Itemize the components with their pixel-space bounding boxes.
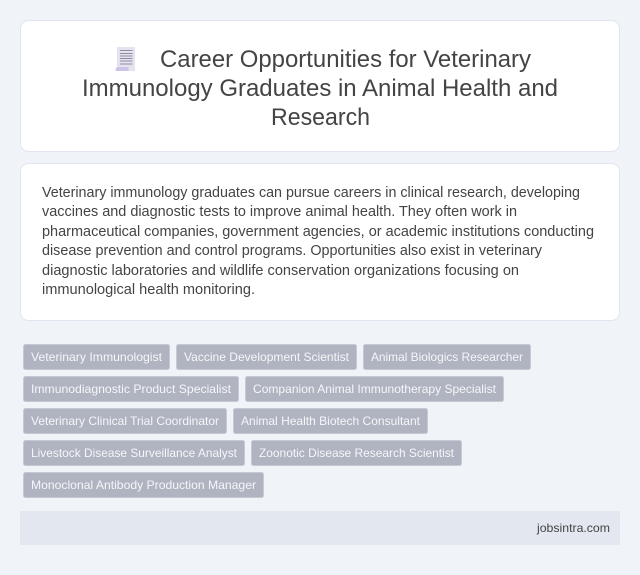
tag: Livestock Disease Surveillance Analyst: [24, 440, 244, 466]
tag: Livestock Disease Surveillance Analyst: Livestock Disease Surveillance Analyst: [31, 446, 238, 460]
tag: Animal Health Biotech Consultant: Animal Health Biotech Consultant: [241, 414, 421, 428]
title: Career Opportunities for Veterinary: [160, 46, 531, 73]
icon: document scroll: [116, 47, 135, 71]
tag: Veterinary Immunologist: [24, 344, 170, 370]
panel: title card: [20, 20, 620, 152]
footer source text: jobsintra.com: [536, 521, 610, 535]
footer bar: [20, 511, 620, 545]
tag: Veterinary Clinical Trial Coordinator: Veterinary Clinical Trial Coordinator: [31, 414, 219, 428]
tag: Animal Biologics Researcher: [364, 344, 530, 370]
tag: Vaccine Development Scientist: Vaccine Development Scientist: [184, 350, 350, 364]
tag: Zoonotic Disease Research Scientist: [252, 440, 462, 466]
tag: Veterinary Clinical Trial Coordinator: [24, 408, 226, 434]
career tags: [24, 344, 530, 498]
tag: Immunodiagnostic Product Specialist: Immunodiagnostic Product Specialist: [31, 382, 232, 396]
description text: vaccines and diagnostic tests to improve animal health. They often work in: [42, 204, 517, 220]
tag: Animal Biologics Researcher: Animal Biologics Researcher: [371, 350, 523, 364]
tag: Companion Animal Immunotherapy Specialist: Companion Animal Immunotherapy Specialist: [253, 382, 497, 396]
tag: Vaccine Development Scientist: [176, 344, 356, 370]
description text: Veterinary immunology graduates can pursue careers in clinical research, developing: [42, 185, 580, 201]
description text: [42, 185, 594, 298]
description text: diagnostic laboratories and wildlife conservation organizations focusing on: [42, 263, 519, 279]
panel: description card: [20, 164, 620, 320]
title: Research: [271, 104, 370, 131]
title: Immunology Graduates in Animal Health and: [82, 75, 558, 102]
tag: Monoclonal Antibody Production Manager: [24, 472, 264, 498]
tag: Veterinary Immunologist: Veterinary Immunologist: [31, 350, 163, 364]
description text: disease prevention and control programs. Opportunities also exist in veterinary: [42, 243, 543, 259]
tag: Monoclonal Antibody Production Manager: Monoclonal Antibody Production Manager: [31, 478, 256, 492]
tag: Zoonotic Disease Research Scientist: Zoonotic Disease Research Scientist: [259, 446, 455, 460]
description text: pharmaceutical companies, government agencies, or academic institutions conducting: [42, 224, 594, 240]
tag: Companion Animal Immunotherapy Specialist: [246, 376, 504, 402]
description text: immunological health monitoring.: [42, 282, 255, 298]
title: [82, 46, 558, 131]
tag: Immunodiagnostic Product Specialist: [24, 376, 238, 402]
tag: Animal Health Biotech Consultant: [234, 408, 428, 434]
